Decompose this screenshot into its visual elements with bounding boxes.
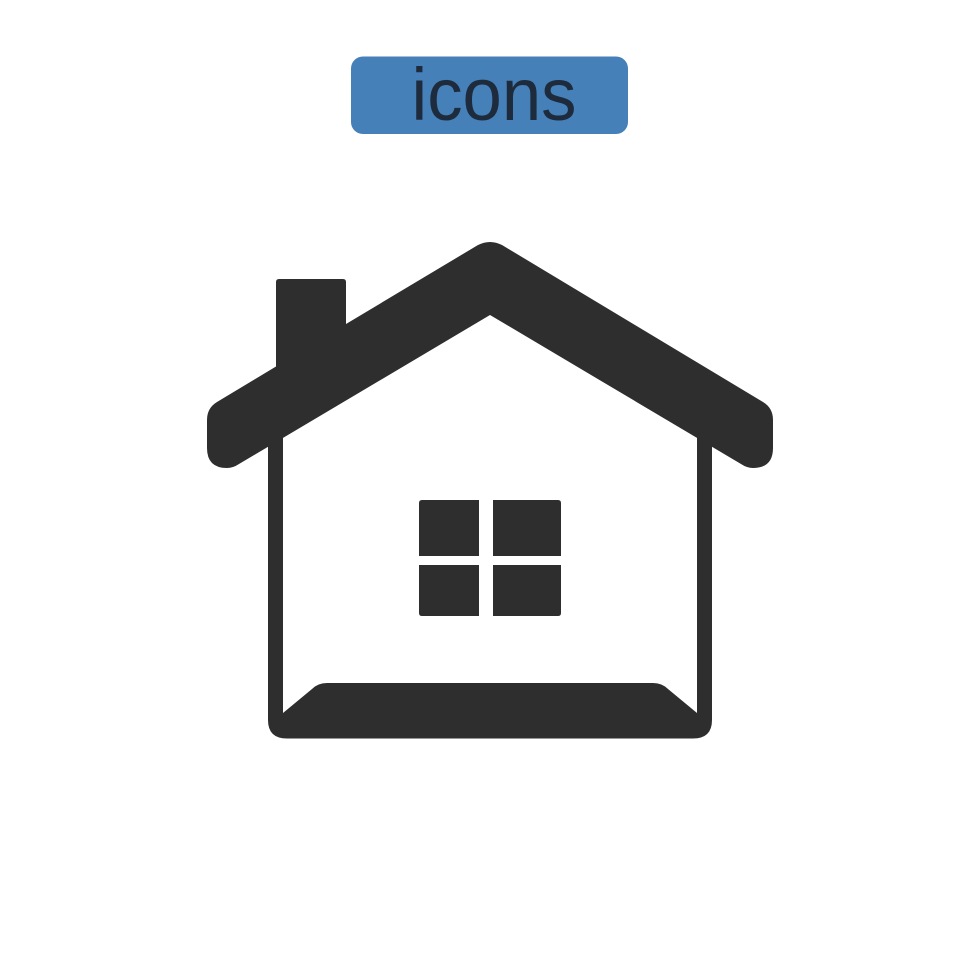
icon: house xyxy=(207,242,773,738)
badge: icons label: icons xyxy=(412,53,576,136)
roof and chimney xyxy=(207,242,773,468)
house walls outline xyxy=(268,424,712,738)
window xyxy=(419,500,561,616)
badge: icons label xyxy=(351,53,628,136)
